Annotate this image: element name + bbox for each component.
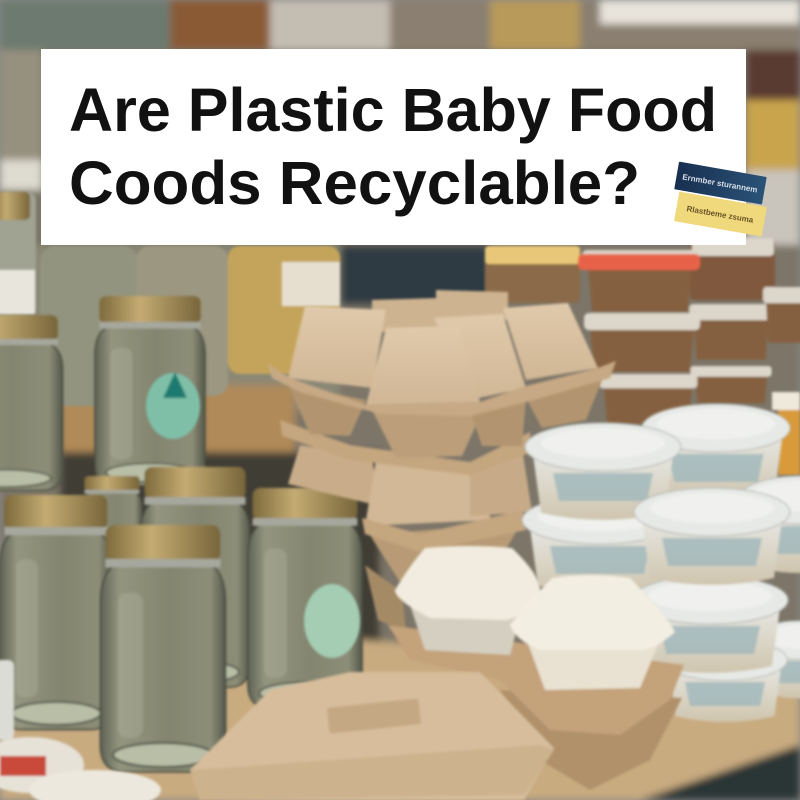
yellow tag: Rlastbeme zsuma xyxy=(686,204,755,225)
clear plastic containers xyxy=(522,404,800,722)
top row under-rim cups xyxy=(288,384,366,436)
navy tag xyxy=(674,162,767,205)
yellow tag xyxy=(674,192,767,237)
navy tag: Ernmber sturannem xyxy=(682,172,758,195)
second and third tray rims xyxy=(280,420,532,475)
kraft clamshell box xyxy=(190,672,554,800)
foreground round tins xyxy=(0,660,161,800)
title card xyxy=(41,49,746,245)
lower stack cups xyxy=(365,565,406,632)
back cups xyxy=(372,298,440,332)
glass jars xyxy=(0,296,362,772)
title text: Coods Recyclable? xyxy=(69,149,640,217)
top tray rim xyxy=(268,361,616,416)
title text: Are Plastic Baby Food xyxy=(69,76,717,144)
top row cups xyxy=(288,306,386,388)
food tubs at back xyxy=(485,238,800,475)
pulp egg cartons xyxy=(268,290,616,632)
jar stickers xyxy=(146,372,360,658)
white lidded pulp bowls in tray xyxy=(388,546,684,790)
back glass jars and pasta xyxy=(0,192,340,406)
